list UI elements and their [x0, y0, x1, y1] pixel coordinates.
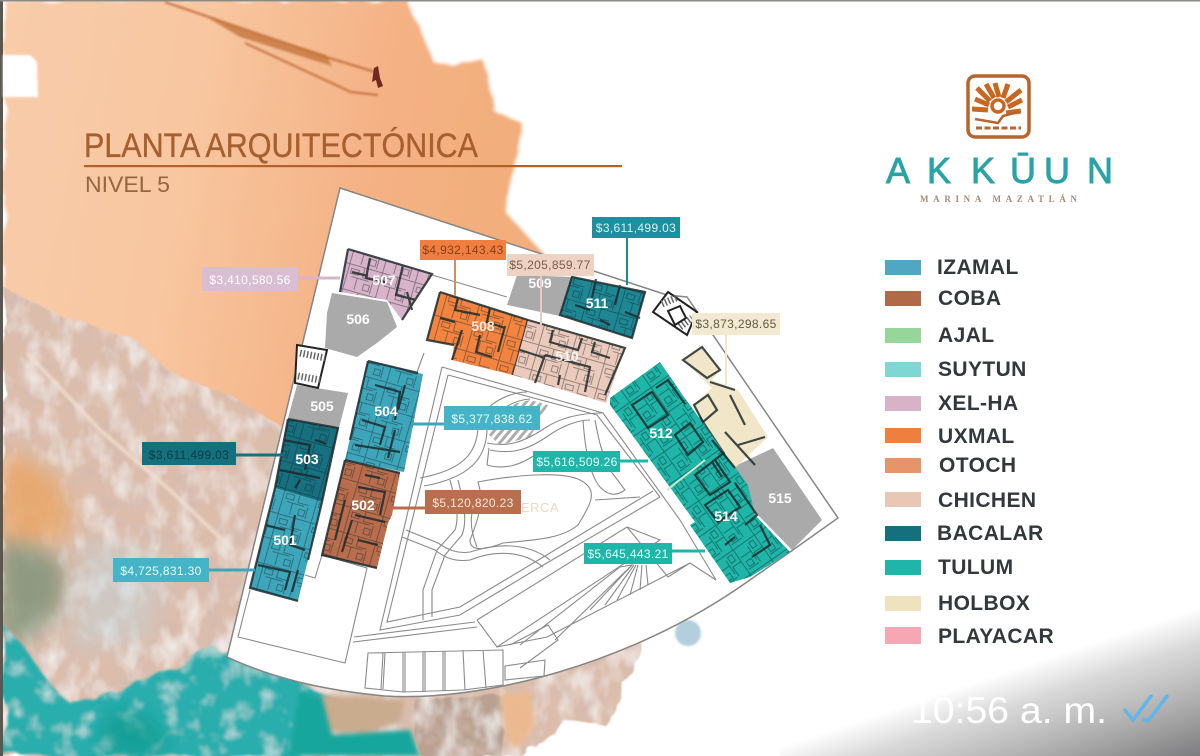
legend: Suytun: SUYTUN [938, 358, 1027, 381]
icon: read check marks [1124, 695, 1168, 721]
price label: Izamal 501 [113, 558, 209, 582]
unit 506: gray core: 506 [346, 311, 370, 327]
unit 515: gray core [733, 448, 822, 550]
legend [885, 256, 1054, 648]
unit 510: CHICHEN: 510 [555, 348, 579, 364]
garden landscape lines [238, 275, 716, 692]
legend: Otoch: OTOCH [939, 454, 1016, 477]
unit 507: XEL-HA: 507 [372, 272, 396, 288]
building outline [227, 188, 838, 697]
legend: Playacar [885, 625, 1054, 648]
unit 511: BACALAR: 511 [586, 295, 609, 311]
unit 505: gray core [288, 385, 348, 428]
price label: Izamal 504 [444, 406, 540, 430]
unit 511: BACALAR [560, 277, 645, 338]
unit 509: gray core: 509 [528, 275, 552, 291]
unit 506: gray core [325, 293, 397, 357]
legend: Uxmal: UXMAL [938, 425, 1015, 448]
hatched ramp [487, 400, 548, 445]
legend: Suytun [885, 358, 1027, 381]
legend: Otoch [885, 454, 1016, 477]
unit 508: UXMAL: 508 [471, 318, 495, 334]
legend: Bacalar [885, 522, 1044, 545]
legend: Izamal [885, 256, 1019, 279]
title: PLANTA ARQUITECTÓNICA [84, 127, 478, 165]
price label: Uxmal [420, 240, 506, 260]
tagline: MARINA MAZATLÁN [920, 194, 1078, 204]
stairs: left [295, 345, 327, 388]
icon: sun emblem [968, 76, 1029, 137]
unit 504: IZAMAL: 504 [374, 403, 398, 419]
price label: Tulum 512 [533, 451, 620, 472]
timestamp: 10:56 a. m. [911, 690, 1107, 731]
price label: Bacalar left: $3,611,499.03 [149, 448, 229, 462]
icon: footprints trail on the sand [165, 2, 378, 95]
unit 502: COBA: 502 [351, 497, 375, 513]
price label: Holbox: $3,873,298.65 [695, 317, 777, 331]
legend: Chichen: CHICHEN [938, 489, 1036, 512]
unit 501: IZAMAL [250, 488, 322, 601]
legend: Bacalar: BACALAR [937, 522, 1044, 545]
leader lines [209, 238, 726, 570]
price label: Bacalar top: $3,611,499.03 [596, 221, 676, 235]
unit 502: COBA [322, 460, 400, 568]
legend: Xel-Ha [885, 392, 1019, 415]
unit 512 and 514: TULUM [610, 362, 790, 583]
price label: Uxmal: $4,932,143.43 [422, 243, 504, 257]
price label: Chichen: $5,205,859.77 [509, 258, 591, 272]
price label: Coba [425, 490, 521, 514]
price label: Holbox [692, 313, 780, 335]
subtitle: NIVEL 5 [85, 172, 170, 197]
unit 515: gray core: 515 [768, 490, 792, 506]
unit 507: XEL-HA [340, 249, 432, 320]
price label: Xel-Ha: $3,410,580.56 [209, 273, 291, 287]
price label: Tulum 512: $5,616,509.26 [536, 455, 618, 469]
legend: Ajal [885, 324, 994, 347]
legend: Tulum: TULUM [938, 556, 1013, 579]
price label: Coba: $5,120,820.23 [432, 496, 514, 510]
panel: floor plan [113, 188, 838, 697]
unit 512 and 514: TULUM: 512 [649, 425, 673, 441]
legend: Holbox [885, 592, 1030, 615]
unit 503: BACALAR [275, 419, 338, 502]
shading: phone screenshot bottom gradient [780, 600, 1200, 756]
wordmark: AKKŪUN [886, 150, 1113, 191]
unit 504: IZAMAL [345, 361, 423, 472]
legend: Coba: COBA [938, 287, 1001, 310]
unit 501: IZAMAL: 501 [273, 532, 297, 548]
legend: Chichen [885, 489, 1036, 512]
icon: figure walking on the beach [372, 66, 383, 88]
label text: ERCA: ERCA [521, 500, 559, 515]
price label: Izamal 501: $4,725,831.30 [120, 564, 202, 578]
unit 509: gray core [507, 275, 572, 316]
legend: Ajal: AJAL [938, 324, 994, 347]
unit 512 and 514: TULUM: 514 [714, 508, 738, 524]
price label: Bacalar top [592, 217, 680, 238]
logo: Akkuun [886, 76, 1113, 204]
icon: water droplet stain [675, 620, 701, 646]
legend: Xel-Ha: XEL-HA [938, 392, 1019, 415]
legend: Uxmal [885, 425, 1015, 448]
legend: Tulum [885, 556, 1013, 579]
unit 513: HOLBOX [683, 347, 768, 468]
unit 510: CHICHEN [513, 320, 625, 403]
price label: Tulum 514 [584, 543, 672, 564]
unit 503: BACALAR: 503 [295, 451, 319, 467]
unit 508: UXMAL [427, 292, 528, 375]
stairs: right [653, 292, 697, 335]
legend: Playacar: PLAYACAR [938, 625, 1054, 648]
price label: Chichen [507, 254, 594, 276]
legend: Holbox: HOLBOX [938, 592, 1030, 615]
price label: Bacalar left [142, 442, 236, 465]
unit 505: gray core: 505 [310, 398, 334, 414]
title underline [84, 165, 622, 167]
legend: Coba [885, 287, 1001, 310]
price label: Tulum 514: $5,645,443.21 [587, 547, 669, 561]
price label: Izamal 504: $5,377,838.62 [451, 412, 533, 426]
legend: Izamal: IZAMAL [937, 256, 1019, 279]
price label: Xel-Ha [202, 267, 298, 291]
